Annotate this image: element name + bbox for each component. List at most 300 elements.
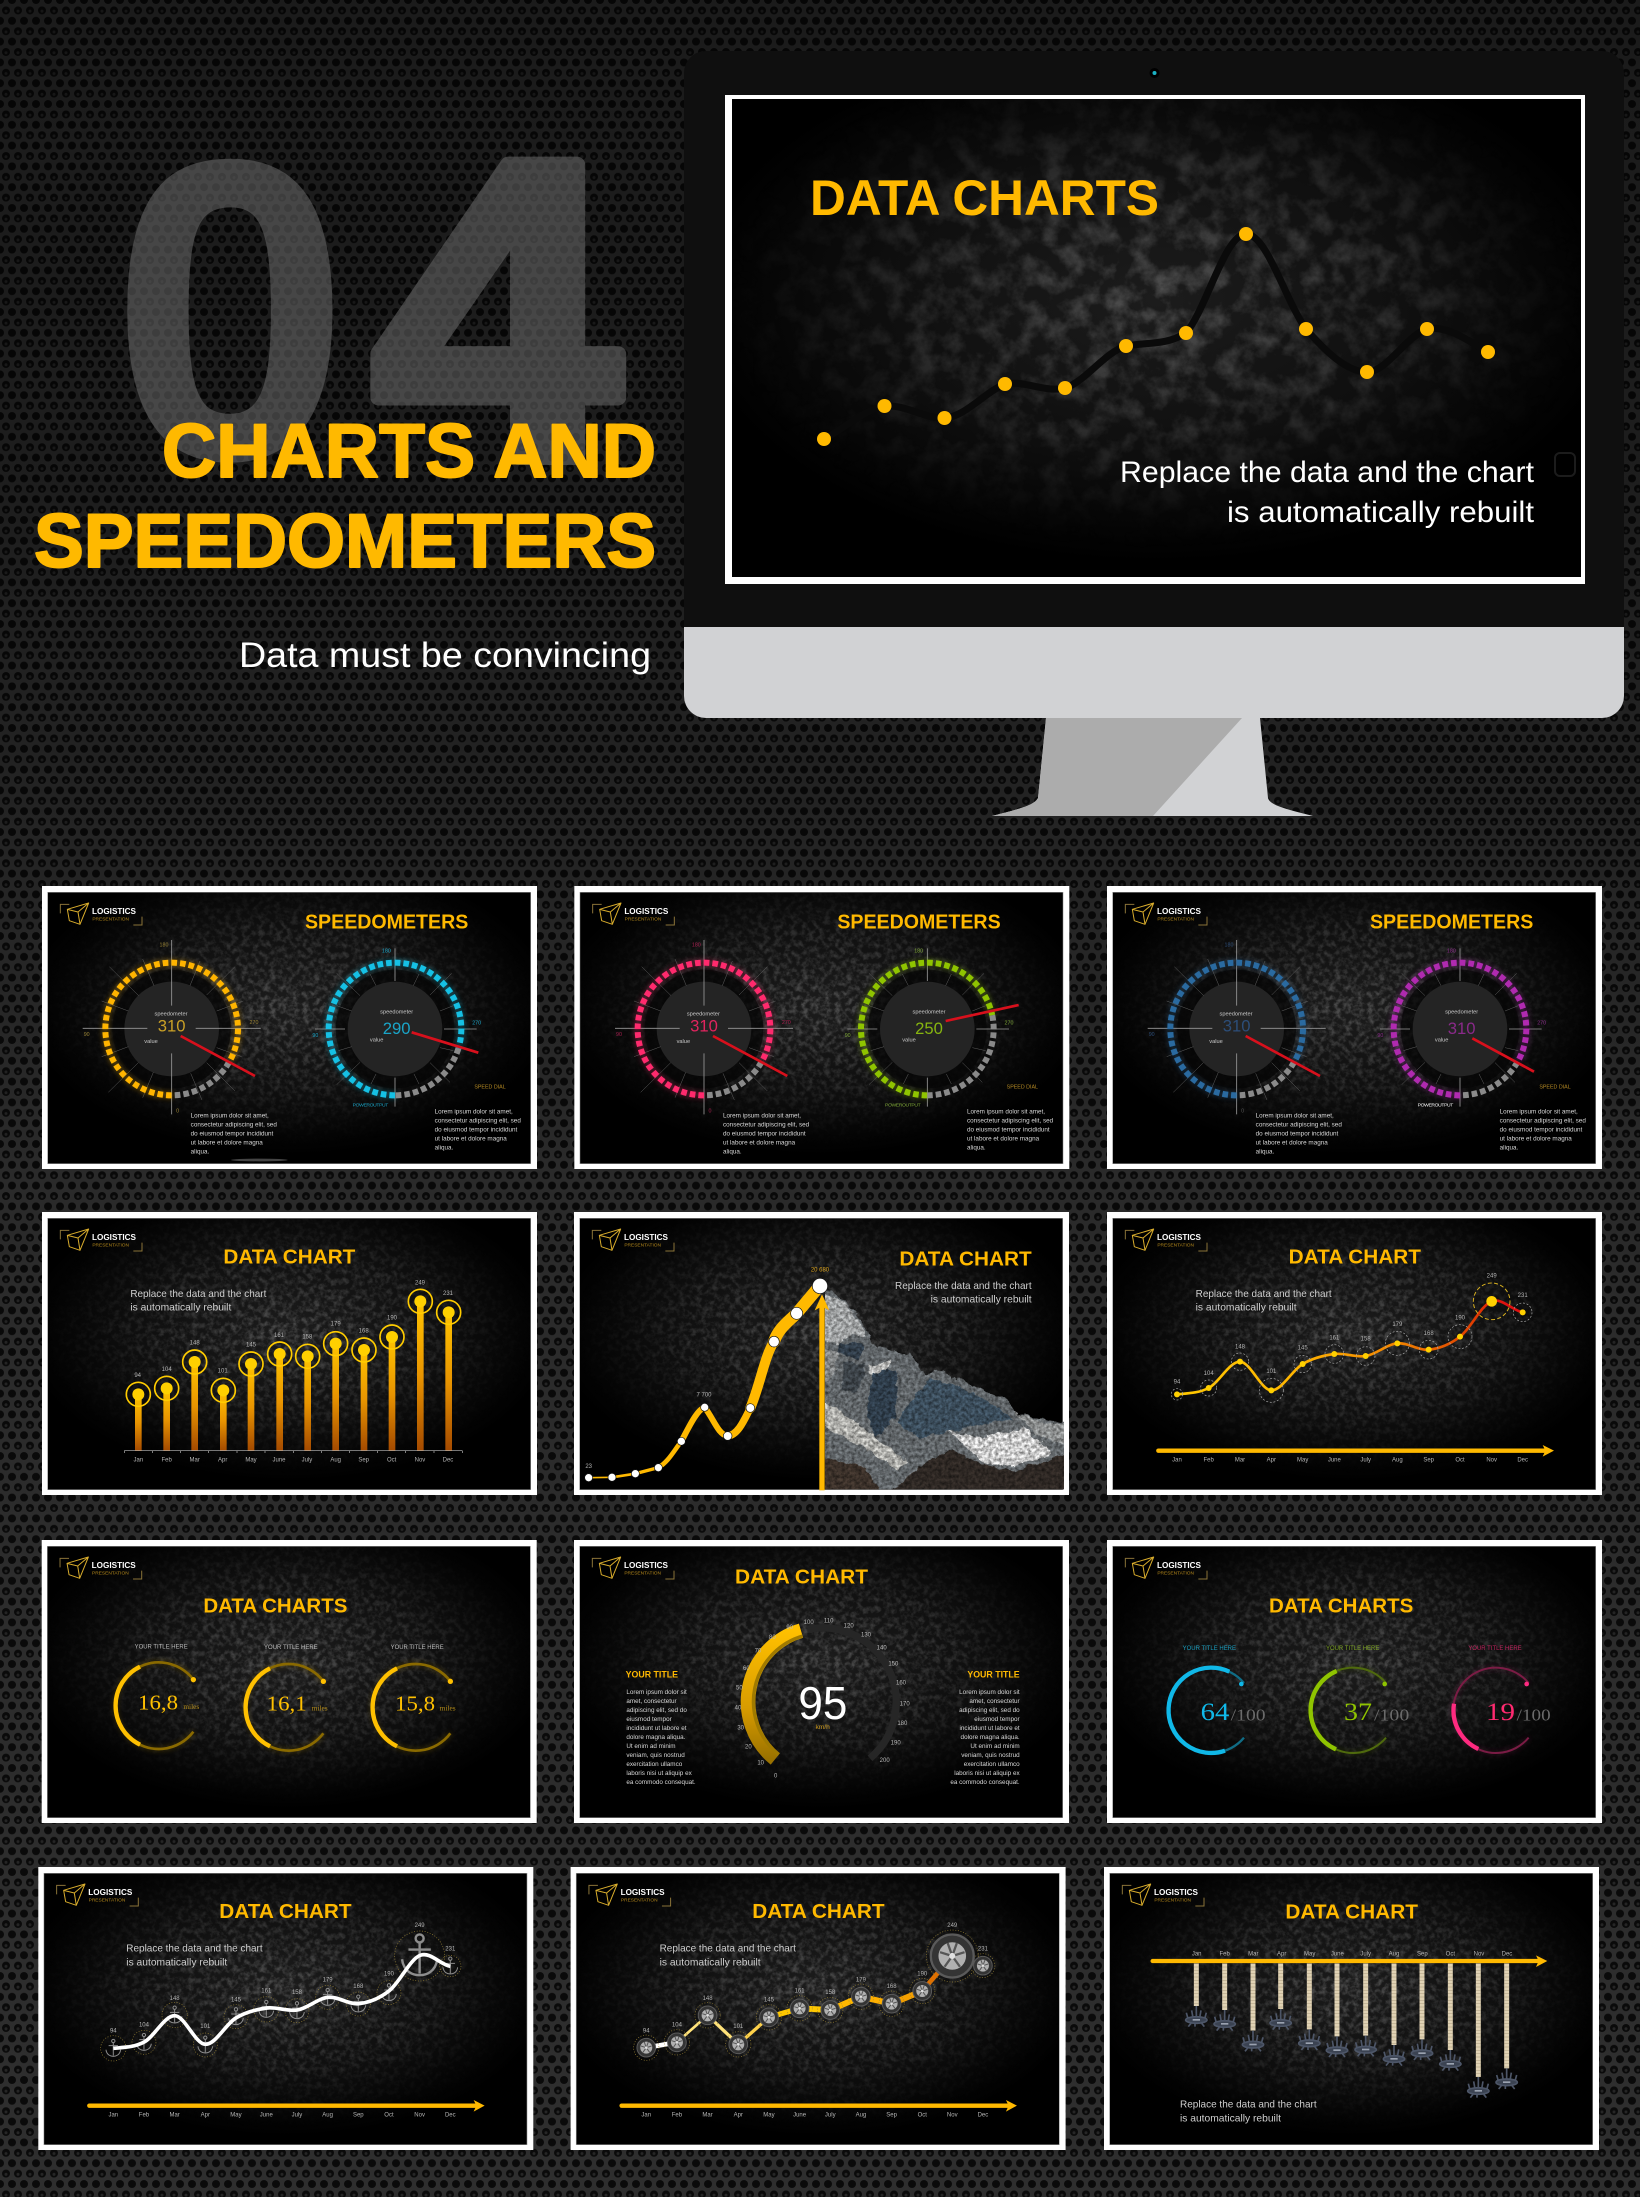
logo — [60, 903, 142, 925]
line chart with wheels: 158 — [825, 1990, 836, 1996]
left text block: adipiscing elit, sed do — [626, 1707, 687, 1714]
right text block: YOUR TITLE — [967, 1670, 1020, 1680]
bar chart: May — [245, 1458, 257, 1464]
line chart with wheels: June — [793, 2112, 807, 2118]
title: CHARTS AND — [162, 409, 656, 494]
slide: wheel line chart — [571, 1867, 1066, 2150]
right text block: Lorem ipsum dolor sit — [959, 1689, 1020, 1696]
subtitle: Data must be convincing — [239, 636, 651, 675]
left text block: Ut enim ad minim — [626, 1743, 676, 1750]
gauge: 310 amber: 90 — [84, 1032, 90, 1038]
logo: PRESENTATION — [92, 916, 129, 921]
text block right: Lorem ipsum dolor sit amet, — [1500, 1108, 1578, 1115]
logo: PRESENTATION — [1157, 1570, 1194, 1575]
big section number 04 — [112, 73, 623, 548]
bar chart: 148 — [190, 1341, 200, 1347]
gauge: 310 magenta: 310 — [1448, 1019, 1476, 1038]
gauge: 120 — [844, 1623, 854, 1629]
line chart with wheels: Dec — [978, 2112, 988, 2118]
bar chart: July — [302, 1458, 312, 1464]
gauge: 250 green: 180 — [914, 948, 923, 954]
line chart with wheels: 190 — [917, 1971, 928, 1977]
gauge: 250 green: 90 — [845, 1033, 851, 1039]
right text block: Ut enim ad minim — [970, 1743, 1020, 1750]
ring chart 64 — [1169, 1645, 1266, 1753]
slide: anchor line chart — [38, 1867, 533, 2150]
text block left: do eiusmod tempor incididunt — [723, 1131, 806, 1138]
text block left: consectetur adipiscing elit, sed — [1256, 1122, 1342, 1129]
logo: LOGISTICS — [621, 1888, 665, 1897]
gauge: 180 — [897, 1721, 908, 1727]
bar chart: Oct — [387, 1458, 397, 1464]
caption: is automatically rebuilt — [1196, 1303, 1297, 1314]
gauge: 140 — [877, 1646, 887, 1652]
gauge: 40 — [735, 1705, 742, 1711]
caption: Replace the data and the chart — [1196, 1289, 1332, 1300]
line chart with anchors: Apr — [201, 2112, 210, 2118]
rising line with nodes: 23 — [585, 1464, 593, 1470]
line chart: May — [1297, 1458, 1308, 1464]
ring chart 16,8 — [115, 1643, 199, 1749]
ring chart 15,8 — [372, 1644, 456, 1751]
text block right: ut labore et dolore magna — [1500, 1135, 1572, 1142]
logo — [1125, 1229, 1207, 1251]
gauge: km/h — [815, 1724, 830, 1731]
gauge: 290 cyan: speedometer — [380, 1009, 413, 1015]
logo — [60, 1229, 142, 1251]
line chart with anchors: Sep — [353, 2112, 364, 2118]
line chart with wheels: Apr — [734, 2112, 743, 2118]
title: SPEEDOMETERS — [34, 499, 656, 584]
left text block: laboris nisi ut aliquip ex — [626, 1770, 693, 1777]
line chart: 161 — [1329, 1336, 1340, 1342]
bar chart — [124, 1280, 462, 1464]
caption — [895, 1281, 1032, 1306]
heading: DATA CHARTS — [203, 1594, 347, 1617]
line chart: Feb — [1204, 1458, 1214, 1464]
line chart: 249 — [1487, 1274, 1497, 1280]
logo: LOGISTICS — [624, 1233, 669, 1242]
caption: Replace the data and the chart — [126, 1944, 263, 1955]
big section number 04: 4 — [372, 74, 623, 548]
line chart: 101 — [1266, 1369, 1277, 1375]
right text block — [950, 1670, 1020, 1786]
logo: LOGISTICS — [624, 907, 669, 916]
gauge: 310 magenta: speedometer — [1445, 1009, 1478, 1015]
text block left: consectetur adipiscing elit, sed — [723, 1122, 810, 1129]
text block right: do eiusmod tempor incididunt — [967, 1126, 1050, 1133]
ring chart 16,1: YOUR TITLE HERE — [264, 1644, 318, 1651]
desktop monitor — [684, 51, 1624, 816]
gauge: 20 — [745, 1745, 752, 1751]
logo: PRESENTATION — [621, 1897, 658, 1902]
gauge: 310 blue — [1148, 940, 1326, 1115]
gauge: 0 — [774, 1774, 778, 1780]
line chart: 145 — [1298, 1346, 1308, 1352]
slide: three amber ring charts — [42, 1540, 537, 1823]
gauge: 130 — [861, 1632, 872, 1638]
logo: LOGISTICS — [1157, 907, 1202, 916]
bar chart: Mar — [190, 1458, 200, 1464]
ring chart 19: /100 — [1517, 1706, 1551, 1725]
line chart with anchors: 190 — [384, 1971, 395, 1977]
gauge: 200 — [880, 1758, 890, 1764]
gauge: 310 magenta: 270 — [1537, 1021, 1546, 1027]
line chart: Oct — [1455, 1458, 1465, 1464]
heading: DATA CHART — [219, 1900, 352, 1923]
right text block: eiusmod tempor — [974, 1716, 1020, 1723]
left text block: Lorem ipsum dolor sit — [626, 1689, 687, 1696]
slide: speedometers amber and cyan — [42, 886, 537, 1169]
gauge: 70 — [755, 1649, 762, 1655]
text block left: do eiusmod tempor incididunt — [1256, 1131, 1339, 1138]
month labels: July — [1360, 1952, 1371, 1958]
text block right: aliqua. — [1500, 1144, 1519, 1151]
line chart with anchors: June — [260, 2112, 273, 2118]
line chart with anchors: Feb — [139, 2112, 150, 2118]
gauge: 310 amber: value — [144, 1039, 158, 1045]
speed dial label: SPEED DIAL — [1539, 1084, 1571, 1090]
rising line with nodes: 20 680 — [811, 1268, 830, 1274]
bar chart: 249 — [415, 1280, 426, 1286]
line chart with anchors: 179 — [323, 1977, 333, 1983]
gauge: 290 cyan: 90 — [312, 1033, 318, 1039]
ring chart 16,1: miles — [312, 1703, 328, 1712]
webcam — [1150, 68, 1160, 78]
monitor chin — [684, 627, 1624, 718]
bar chart: 179 — [331, 1322, 341, 1328]
bar chart: 168 — [359, 1329, 369, 1335]
line chart: 104 — [1204, 1371, 1214, 1377]
right text block: amet, consectetur — [969, 1698, 1020, 1705]
logo — [57, 1884, 138, 1906]
ring chart 64: YOUR TITLE HERE — [1183, 1645, 1236, 1652]
text block left: aliqua. — [191, 1149, 210, 1156]
text block right: Lorem ipsum dolor sit amet, — [435, 1108, 513, 1115]
ring chart 15,8: miles — [440, 1703, 456, 1712]
heading: DATA CHART — [735, 1566, 868, 1589]
right text block: veniam, quis nostrud — [961, 1752, 1020, 1759]
line chart with wheels: Nov — [947, 2112, 958, 2118]
slide: three colored ring charts — [1107, 1540, 1602, 1823]
gauge: 310 blue: speedometer — [1219, 1011, 1253, 1017]
text block right: aliqua. — [435, 1144, 454, 1151]
bar chart: 101 — [218, 1369, 228, 1375]
gauge: 250 green: 250 — [915, 1019, 943, 1038]
text block left: aliqua. — [723, 1149, 742, 1156]
logo — [1122, 1884, 1204, 1906]
month labels: Dec — [1502, 1952, 1512, 1958]
gauge: 310 pink: 270 — [782, 1020, 791, 1026]
logo: PRESENTATION — [1154, 1897, 1191, 1902]
line chart with wheels: 104 — [672, 2022, 683, 2028]
slide: mountain chart — [574, 1212, 1069, 1495]
bar chart: Dec — [443, 1458, 453, 1464]
line chart: 168 — [1424, 1331, 1434, 1337]
line chart with wheels: May — [763, 2112, 775, 2118]
line chart with wheels: Mar — [702, 2112, 713, 2118]
text block left: Lorem ipsum dolor sit amet, — [1256, 1113, 1334, 1120]
right text block: exercitation ullamco — [964, 1761, 1020, 1768]
gauge: 100 — [804, 1620, 814, 1626]
line chart with wheels: 249 — [947, 1923, 958, 1929]
line chart with wheels: Jan — [641, 2112, 651, 2118]
caption — [1180, 2100, 1317, 2124]
heading: SPEEDOMETERS — [1370, 911, 1533, 934]
arrow — [622, 2100, 1017, 2112]
line chart with anchors: 94 — [110, 2028, 117, 2034]
month labels: Oct — [1446, 1952, 1455, 1958]
power output label: POWEROUTPUT — [1418, 1103, 1453, 1109]
ring chart 37: YOUR TITLE HERE — [1326, 1645, 1380, 1652]
text block left: ut labore et dolore magna — [723, 1140, 796, 1147]
rising line with nodes — [585, 1268, 830, 1490]
ring chart 16,8: YOUR TITLE HERE — [135, 1643, 188, 1650]
text block right: do eiusmod tempor incididunt — [435, 1126, 518, 1133]
gauge: 310 pink: value — [677, 1039, 690, 1045]
bar chart: Feb — [162, 1458, 172, 1464]
ring chart 37 — [1311, 1645, 1409, 1753]
gauge: 310 pink: 90 — [616, 1032, 622, 1038]
caption — [130, 1289, 267, 1314]
line chart with wheels: Sep — [886, 2112, 898, 2118]
left text block: dolore magna aliqua. — [626, 1734, 686, 1741]
logo: PRESENTATION — [1157, 916, 1194, 921]
month labels — [1192, 1952, 1512, 1958]
right text block: laboris nisi ut aliquip ex — [954, 1770, 1020, 1777]
text block right: do eiusmod tempor incididunt — [1500, 1126, 1583, 1133]
ring chart 37: /100 — [1374, 1706, 1409, 1725]
line chart: 179 — [1392, 1322, 1403, 1328]
left text block: veniam, quis nostrud — [626, 1752, 685, 1759]
text block left: do eiusmod tempor incididunt — [191, 1131, 274, 1138]
gauge: 290 cyan: 290 — [383, 1019, 411, 1038]
bar chart: Apr — [218, 1458, 227, 1464]
line chart: Mar — [1235, 1458, 1245, 1464]
slide: speed gauge 95 — [574, 1540, 1069, 1823]
ring chart 15,8: YOUR TITLE HERE — [391, 1644, 444, 1651]
gauge: 250 green: speedometer — [912, 1009, 946, 1015]
logo: LOGISTICS — [92, 1561, 136, 1570]
line chart with anchors — [101, 1923, 461, 2118]
line chart: 190 — [1455, 1315, 1466, 1321]
ring chart 16,8: miles — [183, 1702, 199, 1711]
text block left: Lorem ipsum dolor sit amet, — [191, 1113, 269, 1120]
logo: PRESENTATION — [625, 916, 661, 921]
logo: LOGISTICS — [1154, 1888, 1199, 1897]
line chart with anchors: Dec — [445, 2112, 456, 2118]
gauge: 310 magenta — [1377, 948, 1546, 1107]
gauge: 95 — [798, 1677, 847, 1729]
text block right: consectetur adipiscing elit, sed — [967, 1117, 1054, 1124]
ring chart 37: 37 — [1344, 1698, 1372, 1726]
logo: PRESENTATION — [1157, 1242, 1194, 1247]
ring chart 16,8: 16,8 — [138, 1692, 178, 1714]
text block right: consectetur adipiscing elit, sed — [1500, 1117, 1586, 1124]
caption — [660, 1944, 796, 1968]
caption: is automatically rebuilt — [660, 1957, 761, 1968]
heading: DATA CHART — [752, 1900, 885, 1923]
line chart — [1171, 1274, 1532, 1464]
gauge: 10 — [757, 1761, 765, 1767]
ring chart 64: 64 — [1201, 1698, 1230, 1726]
line chart with anchors: Aug — [322, 2112, 333, 2118]
right text block: incididunt ut labore et — [959, 1725, 1020, 1732]
line chart with wheels: July — [825, 2112, 836, 2118]
logo: PRESENTATION — [92, 1570, 129, 1575]
gauge: 250 green — [845, 948, 1019, 1107]
gauge: 290 cyan: 180 — [382, 948, 391, 954]
gauge — [735, 1619, 910, 1780]
heading: DATA CHART — [899, 1248, 1032, 1271]
gauge: 250 green: 270 — [1005, 1021, 1013, 1027]
month labels: Aug — [1389, 1952, 1399, 1958]
gauge: 310 amber: 0 — [176, 1109, 179, 1115]
ring chart 16,1 — [245, 1644, 328, 1751]
screen caption — [1120, 456, 1535, 529]
heading: DATA CHART — [1289, 1245, 1421, 1268]
rising line with nodes: 7 700 — [697, 1392, 712, 1398]
line chart with anchors: May — [230, 2112, 242, 2118]
screen heading: DATA CHARTS — [810, 170, 1159, 226]
line chart with wheels: Oct — [918, 2112, 927, 2118]
gauge: 310 blue: 310 — [1223, 1017, 1251, 1036]
ring chart 19 — [1453, 1645, 1551, 1753]
caption — [126, 1944, 263, 1968]
logo: PRESENTATION — [624, 1570, 661, 1575]
line chart: Dec — [1517, 1458, 1528, 1464]
gauge: 110 — [824, 1619, 834, 1625]
left text block — [626, 1670, 696, 1786]
text block left: Lorem ipsum dolor sit amet, — [723, 1113, 801, 1120]
text block left: ut labore et dolore magna — [1256, 1140, 1328, 1147]
line chart with anchors: Nov — [414, 2112, 425, 2118]
line chart with anchors: 148 — [170, 1996, 180, 2002]
ring chart 16,1: 16,1 — [267, 1694, 307, 1716]
bar chart: 158 — [302, 1335, 313, 1341]
big section number 04: 0 — [112, 73, 348, 548]
ropes with anchors — [1186, 1963, 1517, 2098]
line chart with anchors: 158 — [292, 1990, 303, 1996]
bar chart: 104 — [162, 1367, 172, 1373]
gauge: 290 cyan: 270 — [472, 1021, 481, 1027]
heading: SPEEDOMETERS — [305, 911, 468, 934]
gauge: 170 — [900, 1701, 910, 1707]
logo: PRESENTATION — [624, 1242, 661, 1247]
logo — [60, 1557, 142, 1579]
slide: speedometers pink and green — [574, 886, 1069, 1169]
title — [34, 409, 656, 584]
gauge: 30 — [737, 1726, 745, 1732]
line chart: 231 — [1518, 1293, 1528, 1299]
speed dial label: SPEED DIAL — [474, 1084, 506, 1090]
vertical arrow — [815, 1294, 829, 1490]
speed dial label: SPEED DIAL — [1007, 1084, 1038, 1090]
logo: LOGISTICS — [92, 1233, 137, 1242]
line chart with wheels: 148 — [703, 1996, 713, 2002]
gauge: 310 blue: value — [1209, 1039, 1223, 1045]
line chart: July — [1360, 1458, 1371, 1464]
gauge: 50 — [736, 1685, 743, 1691]
logo: LOGISTICS — [1157, 1561, 1202, 1570]
month labels: Feb — [1220, 1952, 1230, 1958]
line chart with anchors: 231 — [445, 1946, 456, 1952]
logo: PRESENTATION — [89, 1897, 125, 1902]
line chart: 148 — [1235, 1344, 1246, 1350]
line chart with wheels: 179 — [856, 1977, 867, 1983]
monitor screen — [725, 95, 1585, 584]
right text block: dolore magna aliqua. — [961, 1734, 1020, 1741]
logo — [592, 1557, 674, 1579]
gauge: 90 — [786, 1625, 794, 1631]
arrow — [1158, 1445, 1554, 1457]
bar chart: Nov — [415, 1458, 425, 1464]
text block left: consectetur adipiscing elit, sed — [191, 1122, 277, 1129]
logo: LOGISTICS — [1157, 1233, 1202, 1242]
line chart with wheels — [634, 1923, 995, 2118]
caption — [1196, 1289, 1332, 1314]
gauge: 190 — [891, 1740, 901, 1746]
gauge: 160 — [896, 1681, 907, 1687]
right text block: adipiscing elit, sed do — [959, 1707, 1020, 1714]
line chart with anchors: Jan — [108, 2112, 118, 2118]
caption: is automatically rebuilt — [931, 1295, 1032, 1306]
caption: Replace the data and the chart — [660, 1944, 796, 1955]
slide: rope and anchor chart — [1104, 1867, 1599, 2150]
gauge: 310 pink: 0 — [709, 1109, 712, 1115]
slide: lollipop bar chart — [42, 1212, 537, 1495]
arrow — [89, 2100, 485, 2112]
month labels: May — [1304, 1952, 1315, 1958]
caption: is automatically rebuilt — [1180, 2113, 1281, 2124]
line chart with wheels: 94 — [643, 2028, 650, 2034]
logo: LOGISTICS — [88, 1888, 133, 1897]
line chart: Aug — [1392, 1458, 1403, 1464]
logo: LOGISTICS — [92, 907, 137, 916]
ring chart 19: 19 — [1486, 1698, 1515, 1726]
line chart: Nov — [1486, 1458, 1497, 1464]
heading: DATA CHART — [223, 1245, 356, 1268]
heading: SPEEDOMETERS — [837, 911, 1001, 934]
line chart with anchors: 168 — [353, 1984, 364, 1990]
logo — [1125, 1557, 1207, 1579]
logo — [593, 903, 674, 925]
power output label: POWEROUTPUT — [885, 1103, 921, 1109]
bar chart: Jan — [134, 1458, 143, 1464]
line chart: Jan — [1172, 1458, 1182, 1464]
gauge: 310 pink: speedometer — [687, 1011, 720, 1017]
caption: Replace the data and the chart — [130, 1289, 267, 1300]
line chart with anchors: 249 — [415, 1923, 425, 1929]
left text block: ea commodo consequat. — [626, 1779, 696, 1786]
text block left: ut labore et dolore magna — [191, 1140, 263, 1147]
gauge: 310 pink: 180 — [692, 942, 701, 948]
text block right: ut labore et dolore magna — [967, 1135, 1040, 1142]
bar chart: 231 — [443, 1291, 454, 1297]
slide: speedometers blue and magenta — [1107, 886, 1602, 1169]
ring chart 19: YOUR TITLE HERE — [1468, 1645, 1522, 1652]
logo — [592, 1229, 674, 1251]
text block right: Lorem ipsum dolor sit amet, — [967, 1108, 1045, 1115]
line chart with anchors: 101 — [200, 2024, 211, 2030]
screen caption: is automatically rebuilt — [1227, 496, 1535, 529]
month labels: Nov — [1474, 1952, 1484, 1958]
screen caption: Replace the data and the chart — [1120, 456, 1535, 489]
monitor stand — [992, 718, 1313, 816]
gauge: 310 magenta: 180 — [1447, 948, 1456, 954]
gauge: 60 — [743, 1666, 750, 1672]
month labels: Apr — [1277, 1952, 1286, 1958]
